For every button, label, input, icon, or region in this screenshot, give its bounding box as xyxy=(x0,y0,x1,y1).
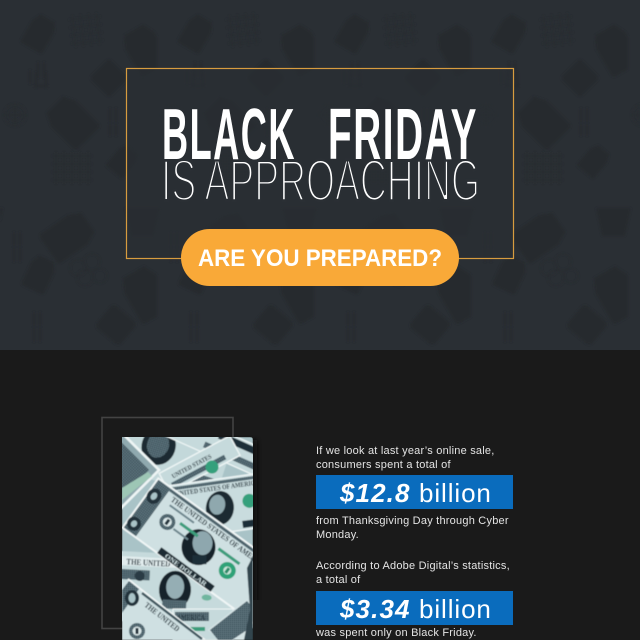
bill top left xyxy=(127,437,226,482)
bill lower xyxy=(122,550,253,629)
bill bottom middle xyxy=(173,609,233,640)
text: thanksgiving to cyber monday: from Thanksgiving Day through Cyber xyxy=(316,515,509,527)
bill left edge green tint xyxy=(122,472,152,500)
title: black friday: BLACK xyxy=(162,95,296,175)
panel: hero header xyxy=(0,0,640,350)
text: black friday spend: was spent only on Black Friday. xyxy=(316,627,477,639)
bill upper diagonal xyxy=(158,437,241,486)
bill bottom left xyxy=(122,579,205,640)
bill main xyxy=(122,477,253,624)
text: last year intro: consumers spent a total of xyxy=(316,459,451,471)
gold frame xyxy=(126,68,514,258)
stat: 12.8 billion: billion xyxy=(419,478,492,508)
stat: 12.8 billion xyxy=(316,475,513,509)
text: thanksgiving to cyber monday xyxy=(316,515,509,541)
bill bottom left: THE UNITED xyxy=(143,600,182,634)
bill main: THE UNITED STATES OF AMERICA xyxy=(169,495,269,571)
photo of dollar bills xyxy=(122,437,253,640)
bill left corner xyxy=(122,437,161,510)
bill bottom middle: AMERICA xyxy=(177,613,205,622)
text: last year intro xyxy=(316,445,495,471)
pill text: ARE YOU PREPARED? xyxy=(198,245,442,272)
text: adobe statistics: According to Adobe Digital’s statistics, xyxy=(316,560,510,572)
text: adobe statistics xyxy=(316,560,510,586)
bill main: ONE DOLLAR xyxy=(163,553,208,588)
bill bottom right xyxy=(208,600,251,640)
stat: 3.34 billion xyxy=(316,591,513,625)
photo shadow xyxy=(127,440,257,640)
title: black friday: FRIDAY xyxy=(328,95,478,175)
stat: 12.8 billion: $12.8 xyxy=(340,478,411,508)
green seal top xyxy=(206,460,218,474)
header background xyxy=(0,0,640,350)
bill second row xyxy=(170,473,253,532)
bill lower: THE UNITED xyxy=(126,556,171,569)
bill upper diagonal: UNITED STATES xyxy=(171,453,213,480)
panel: money photo xyxy=(101,416,258,640)
background icon pattern xyxy=(0,0,640,350)
stat: 3.34 billion: $3.34 xyxy=(340,594,411,624)
dark right edge xyxy=(244,556,253,640)
bill second row: UNITED STATES OF AMERICA xyxy=(175,478,260,498)
text: thanksgiving to cyber monday: Monday. xyxy=(316,529,359,541)
orange pill xyxy=(181,229,459,286)
bill top right xyxy=(164,437,253,474)
stat: 3.34 billion: billion xyxy=(419,594,492,624)
text: last year intro: If we look at last year’s online sale, xyxy=(316,445,495,457)
text: adobe statistics: a total of xyxy=(316,574,360,586)
photo outline frame xyxy=(102,418,233,628)
